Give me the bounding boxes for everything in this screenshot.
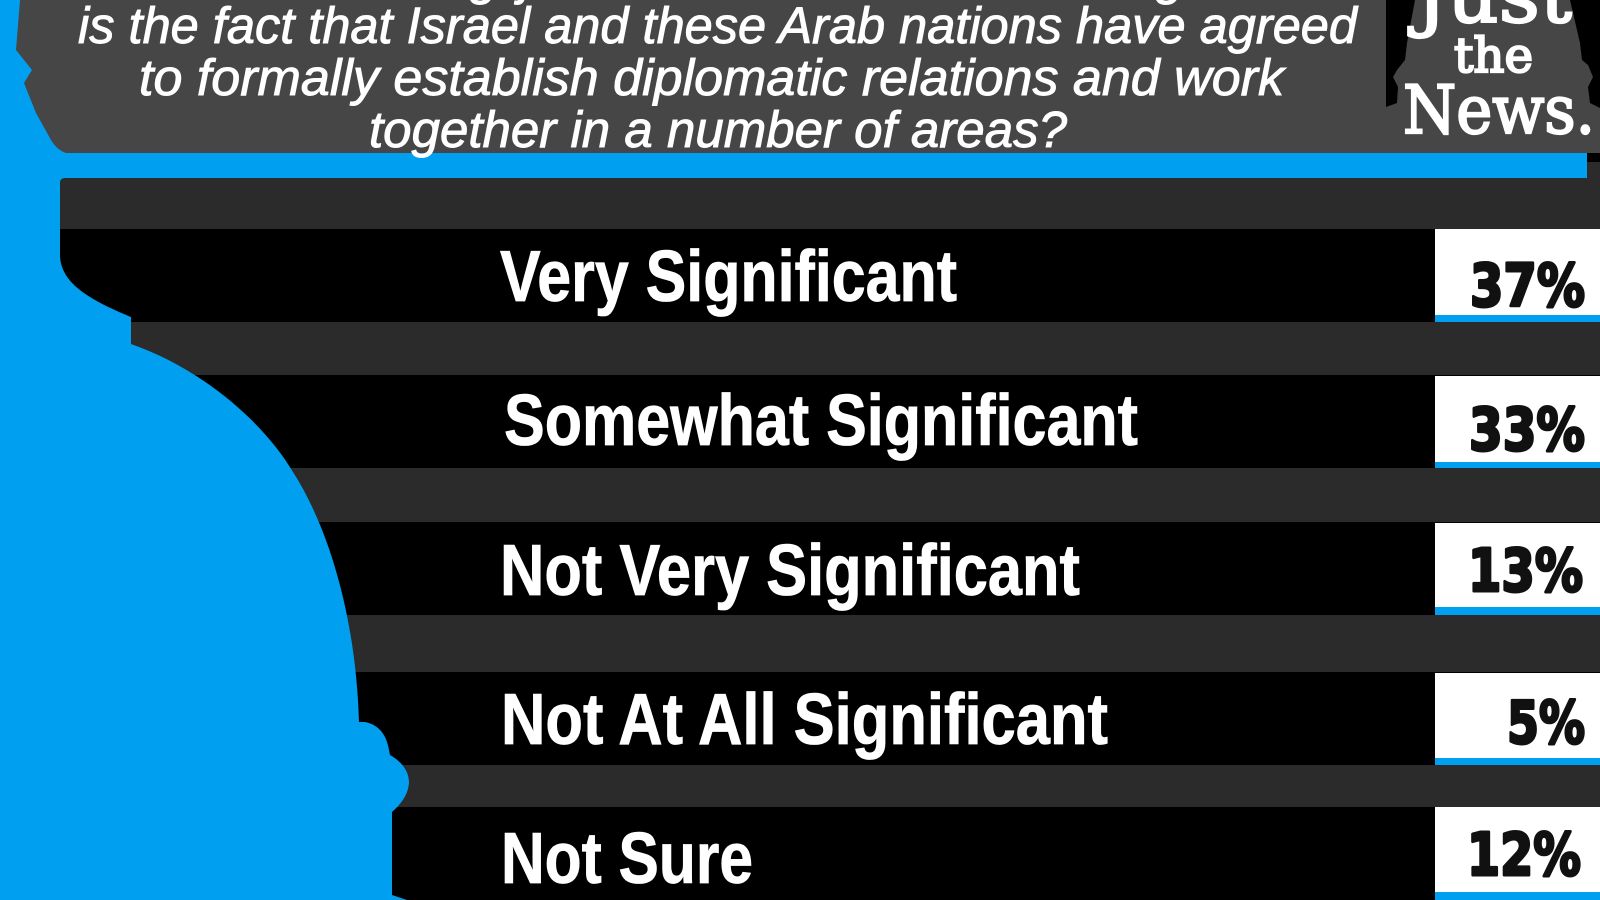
row: Not At All Significant: Not At All Significant: [501, 680, 1108, 760]
row: Not Sure: [60, 807, 1600, 900]
row: Not At All Significant: [60, 672, 1600, 765]
row: Somewhat Significant: Somewhat Significant: [504, 381, 1138, 461]
logo: Just the News: [1386, 0, 1600, 149]
row: Very Significant: [60, 229, 1600, 322]
row: Very Significant: Very Significant: [500, 237, 957, 317]
panel: question header: [16, 0, 1600, 158]
question text: to formally establish diplomatic relations and work: [139, 49, 1287, 106]
row: Not Sure: Not Sure: [501, 819, 753, 899]
capitol dome silhouette: [0, 240, 409, 900]
question text: together in a number of areas?: [369, 101, 1068, 158]
row: Not Very Significant: Not Very Significant: [500, 531, 1080, 611]
row: Somewhat Significant: [60, 375, 1600, 468]
results chart: [60, 229, 1600, 900]
panel: results background: [60, 153, 1600, 900]
row: Not Very Significant: [60, 522, 1600, 615]
logo: Just the News: the: [1454, 28, 1533, 84]
question text: [78, 0, 1359, 158]
